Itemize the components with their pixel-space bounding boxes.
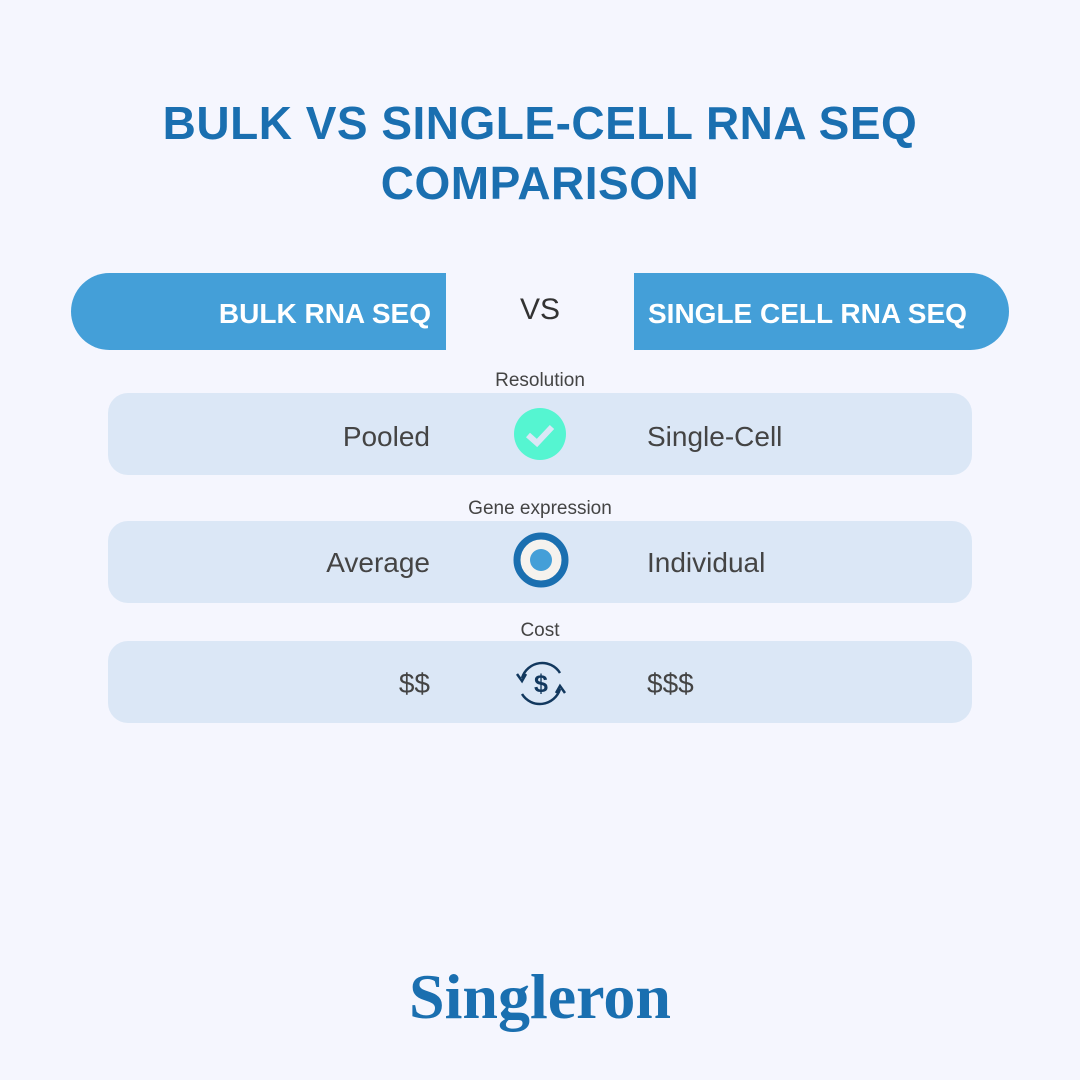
header: single cell: SINGLE CELL RNA SEQ [648, 298, 967, 329]
header: bulk: BULK RNA SEQ [219, 298, 431, 329]
icon: dollar cycle [516, 662, 566, 706]
logo: Singleron: Singleron [409, 961, 671, 1032]
label: resolution: Resolution [495, 370, 585, 391]
text: pooled: Pooled [343, 421, 430, 452]
title: COMPARISON [381, 157, 699, 209]
header: bulk [71, 273, 446, 350]
title: BULK VS SINGLE-CELL RNA SEQ [163, 97, 917, 149]
label: gene expression: Gene expression [468, 498, 612, 519]
icon: dollar cycle: $ [534, 670, 548, 698]
row: gene expression [108, 521, 972, 603]
label: cost: Cost [520, 620, 560, 641]
header: single cell [634, 273, 1009, 350]
icon: target [514, 532, 568, 588]
row: resolution [108, 393, 972, 475]
title [163, 97, 917, 209]
text: single cell cost: $$$ [647, 668, 694, 699]
vs label: VS [520, 293, 560, 326]
text: individual: Individual [647, 547, 765, 578]
icon: check [514, 408, 566, 460]
text: single-cell: Single-Cell [647, 421, 782, 452]
row: cost [108, 641, 972, 723]
text: average: Average [326, 547, 430, 578]
text: bulk cost: $$ [399, 668, 430, 699]
